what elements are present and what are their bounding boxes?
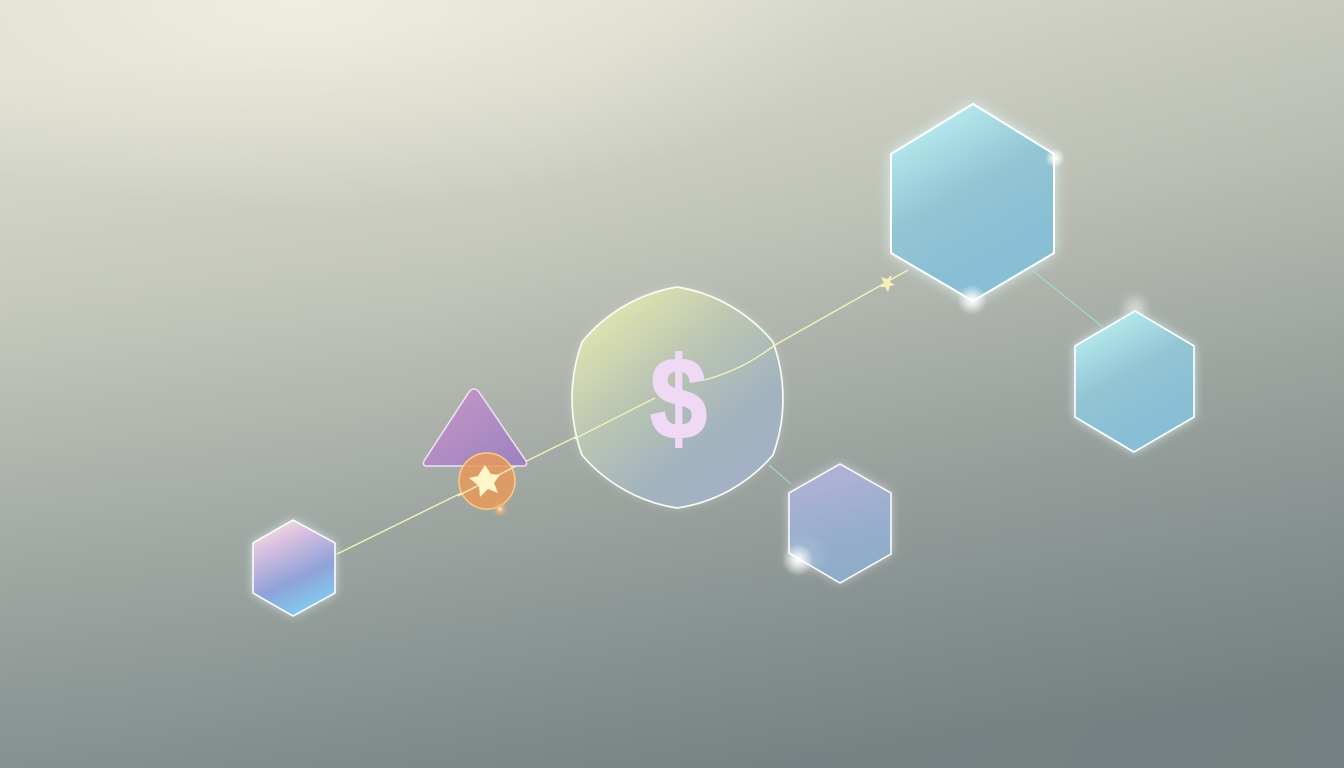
connector line: rising trend	[337, 270, 908, 554]
purple blue hexagon	[782, 464, 891, 583]
purple triangle	[423, 389, 527, 466]
large blue hexagon	[891, 104, 1065, 315]
icon: star	[469, 465, 500, 497]
small iridescent hexagon	[253, 520, 335, 616]
central circle with dollar sign	[572, 287, 783, 508]
line through circle	[574, 345, 775, 439]
connector: large hexagon to small hexagon	[1033, 271, 1103, 327]
icon: small star on line	[880, 275, 895, 292]
small blue hexagon	[1075, 297, 1194, 452]
connector: circle to purple hexagon	[769, 465, 791, 484]
orange circle with star	[458, 453, 515, 517]
dollar sign: $	[650, 335, 707, 464]
